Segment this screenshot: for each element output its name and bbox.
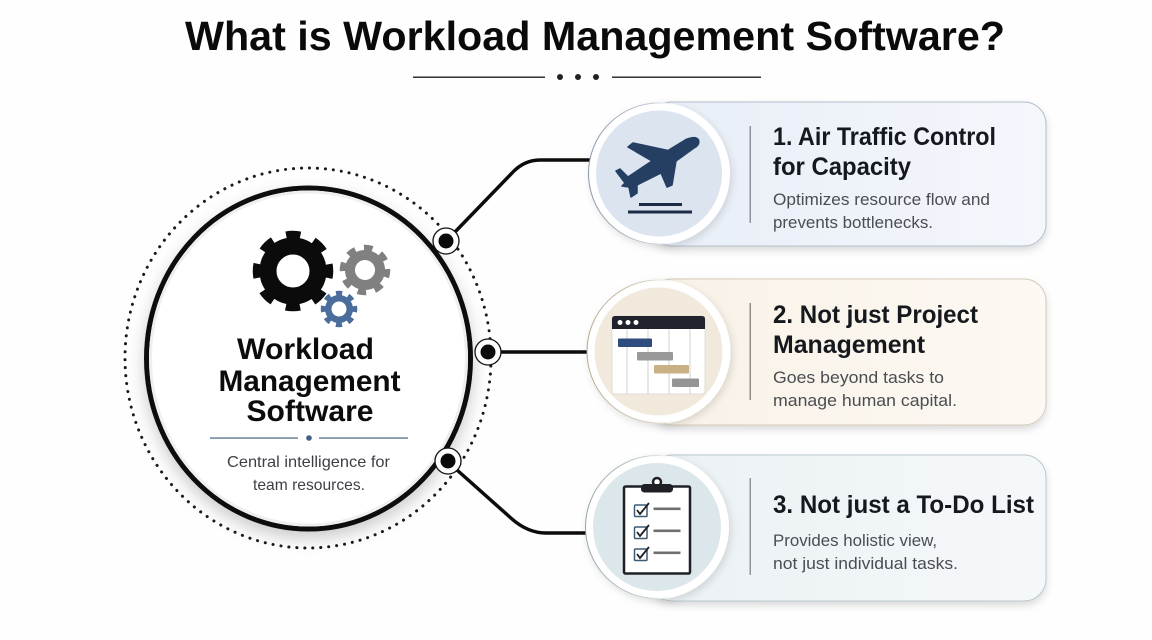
blue gear: [324, 294, 354, 324]
hub heading: Software: [246, 395, 374, 428]
hub heading: Management: [218, 365, 401, 398]
card divider: [750, 126, 751, 223]
node 2: [475, 339, 501, 365]
icon: clipboard: [624, 478, 690, 574]
card heading: [773, 301, 979, 359]
connector: hub to card 2: [500, 350, 592, 354]
hub inner edge: [150, 192, 466, 525]
connector: hub to card 1: [454, 160, 592, 233]
card text: Goes beyond tasks to: [773, 368, 944, 387]
gray gear: [340, 245, 390, 295]
hub circle: [146, 188, 470, 529]
card divider: [750, 478, 751, 575]
card text: Optimizes resource flow and: [773, 190, 990, 209]
title: What is Workload Management Software?: [185, 13, 1005, 59]
panel: not just a to-do list: [586, 455, 1046, 601]
hub divider: [210, 435, 408, 441]
icon: gantt window: [612, 316, 705, 394]
panel: air traffic control: [588, 102, 1046, 246]
icon badge: clipboard: [586, 456, 728, 598]
card divider: [750, 303, 751, 400]
card text: prevents bottlenecks.: [773, 213, 933, 232]
title ornament: [413, 74, 761, 80]
icon badge: gantt chart: [587, 280, 730, 423]
hub description: [227, 454, 391, 494]
icon: runway lines: [628, 203, 692, 214]
icon badge: airplane: [588, 103, 730, 244]
card text: manage human capital.: [773, 391, 957, 410]
card text: not just individual tasks.: [773, 554, 958, 573]
hub description: Central intelligence for: [227, 454, 391, 471]
hub heading: [218, 333, 401, 428]
large black gear: [258, 236, 328, 306]
card background: [650, 102, 1046, 246]
card heading: 2. Not just Project: [773, 301, 979, 329]
dotted orbit ring: [125, 168, 491, 548]
card text: [773, 190, 990, 232]
hub description: team resources.: [253, 477, 365, 494]
card heading: for Capacity: [773, 153, 911, 181]
card heading: [773, 123, 996, 181]
central hub: [146, 188, 470, 529]
node 1: [433, 228, 459, 254]
connector: hub to card 3: [457, 470, 590, 533]
icon: gears: [258, 236, 390, 324]
node 3: [435, 448, 461, 474]
card text: [773, 531, 958, 573]
card heading: 3. Not just a To-Do List: [773, 491, 1035, 519]
panel: not just project management: [587, 279, 1046, 425]
card text: Provides holistic view,: [773, 531, 937, 550]
card heading: 1. Air Traffic Control: [773, 123, 996, 151]
card background: [650, 455, 1046, 601]
card text: [773, 368, 957, 410]
card background: [650, 279, 1046, 425]
icon: airplane: [616, 138, 699, 197]
card heading: Management: [773, 331, 926, 359]
hub heading: Workload: [237, 333, 374, 366]
